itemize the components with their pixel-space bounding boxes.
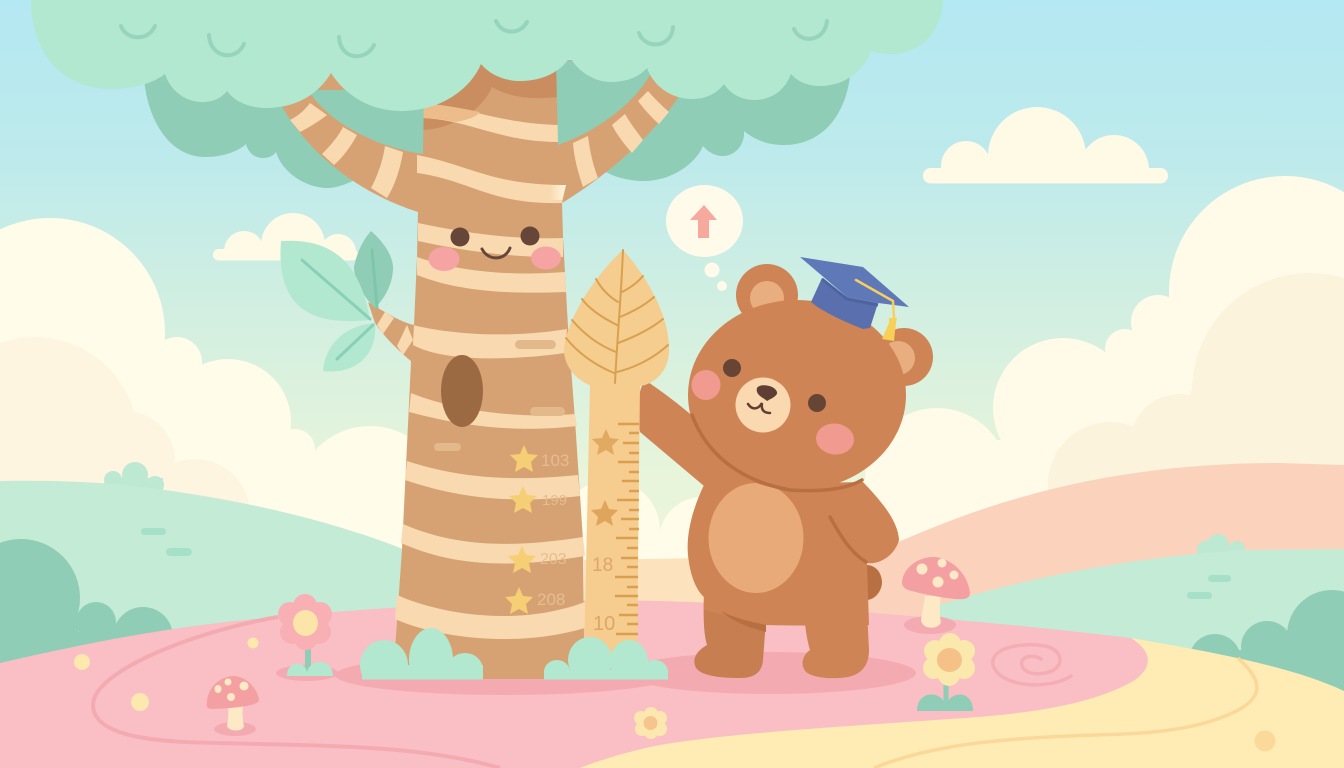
canopy: back left bbox=[143, 60, 400, 188]
bear: head bbox=[688, 300, 906, 490]
hill: centre peach bbox=[584, 558, 884, 610]
curve on yellow path bbox=[874, 658, 1257, 768]
canopy: front left wedge bbox=[308, 90, 424, 154]
cloud: small upper right bbox=[923, 107, 1168, 184]
bear: belly bbox=[708, 483, 804, 593]
bush: lower right dark bbox=[1189, 590, 1344, 710]
bear: arm line bbox=[830, 517, 866, 562]
cloud: centre behind bear bbox=[560, 480, 890, 600]
canopy: front right wedge bbox=[556, 60, 655, 145]
trunk height numbers: 199 bbox=[542, 492, 567, 509]
cap tassel bbox=[856, 280, 894, 318]
meadow dots bbox=[74, 638, 258, 711]
trunk height numbers: 103 bbox=[541, 451, 569, 470]
bear: left ear bbox=[736, 264, 798, 326]
ruler leaf top bbox=[564, 250, 669, 386]
tree face bbox=[428, 226, 561, 271]
ruler star upper bbox=[592, 429, 619, 455]
ground shadow: bear bbox=[624, 652, 916, 694]
leaf: dark bbox=[354, 231, 393, 308]
ground shadow: tree bbox=[335, 655, 675, 695]
bear bbox=[688, 264, 933, 678]
graduation cap bbox=[800, 257, 909, 341]
trunk height numbers: 203 bbox=[540, 551, 567, 568]
crown shade bbox=[423, 60, 557, 130]
spiral bbox=[993, 645, 1071, 685]
leaf: lower bbox=[323, 323, 375, 372]
bush: lower left dark bbox=[0, 539, 173, 682]
bear: blush bbox=[692, 370, 856, 456]
bush: left hill bbox=[104, 462, 164, 494]
canopy smiles bbox=[121, 21, 827, 56]
bear: body bbox=[688, 482, 899, 625]
bear: left leg bbox=[694, 590, 766, 678]
ruler with leaf top bbox=[564, 250, 669, 660]
grass marks: right hill bbox=[1187, 575, 1231, 599]
bear: right ear bbox=[875, 328, 933, 386]
ground: pink meadow bbox=[0, 600, 1148, 768]
bear: nose bbox=[757, 385, 777, 401]
bush: trunk base right bbox=[544, 637, 668, 684]
up arrow bbox=[690, 205, 717, 238]
cloud: small left of tree bbox=[213, 213, 358, 260]
meadow winding line bbox=[93, 617, 500, 768]
bear: chin line bbox=[692, 415, 862, 491]
bear: tail bbox=[866, 565, 882, 600]
tree: trunk and branches bbox=[276, 60, 680, 679]
bush: trunk base left bbox=[360, 628, 483, 680]
bear: leg crease bbox=[721, 611, 766, 632]
small branch stripe two bbox=[397, 325, 413, 355]
ground: yellow path bbox=[560, 638, 1344, 768]
ruler number upper: 18 bbox=[592, 555, 613, 576]
hill: left mint bbox=[0, 481, 420, 680]
ruler number lower: 10 bbox=[593, 613, 615, 635]
hill: right peach bbox=[840, 463, 1344, 700]
trunk stars bbox=[505, 445, 538, 614]
bear: right leg bbox=[803, 590, 869, 678]
canopy: light foliage bbox=[31, 0, 943, 111]
trunk stripes bbox=[395, 103, 585, 639]
leaf: large bbox=[280, 241, 370, 321]
dot on yellow path bbox=[1254, 730, 1276, 752]
ruler ticks bbox=[615, 424, 639, 634]
canopy: back right bbox=[606, 60, 851, 181]
stripe highlight bbox=[550, 185, 566, 200]
stripe in shade bbox=[423, 103, 480, 122]
cloud bank: left inner bbox=[0, 337, 250, 569]
branch stripes bbox=[290, 91, 669, 198]
cloud bank: left bbox=[0, 218, 444, 574]
small branch stripes bbox=[377, 312, 394, 334]
bear: mouth bbox=[748, 403, 770, 413]
flower: pink bbox=[276, 594, 338, 681]
bear: muzzle bbox=[736, 378, 790, 432]
ruler star lower bbox=[591, 500, 618, 526]
trunk height numbers bbox=[537, 451, 569, 609]
mushroom: lower left bbox=[207, 676, 259, 736]
grass marks: left hill bbox=[141, 528, 192, 556]
bush: right hill bbox=[1197, 534, 1245, 560]
bear: body lower fill bbox=[704, 590, 866, 626]
thought dots bbox=[704, 262, 720, 278]
bear: raised arm bbox=[638, 380, 770, 505]
cloud bank: right bbox=[860, 176, 1344, 600]
mushroom: right bbox=[902, 557, 970, 634]
cloud bank: right inner bbox=[1048, 273, 1344, 571]
flower: small ground bbox=[634, 707, 667, 739]
thought bubble with up arrow bbox=[666, 185, 743, 291]
tree hollow bbox=[441, 355, 483, 427]
bear: eyes bbox=[723, 359, 826, 412]
flower: yellow bbox=[917, 633, 975, 711]
small branch bbox=[368, 302, 414, 362]
bark marks bbox=[434, 340, 565, 451]
trunk height numbers: 208 bbox=[537, 590, 565, 609]
hill: right mint bbox=[930, 549, 1344, 720]
